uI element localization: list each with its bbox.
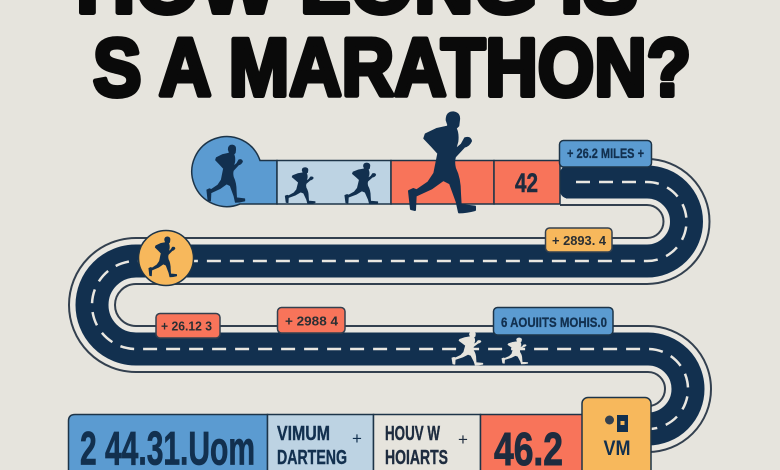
winding road — [92, 166, 688, 429]
label: orange distance one — [156, 314, 220, 338]
bottom panel: off-white: HOUV W — [385, 423, 440, 445]
badge: runner in orange circle — [138, 230, 194, 286]
label: orange distance one: + 26.12 3 — [161, 318, 212, 334]
bottom panel: blue total — [68, 414, 268, 470]
label: yellow distance — [546, 228, 612, 252]
label: 26.2 miles — [560, 140, 652, 167]
bottom panel: off-white — [374, 414, 480, 470]
runner: in blue circle — [207, 145, 245, 202]
runner: light on road two — [502, 338, 528, 364]
label: 26.2 miles: + 26.2 MILES + — [567, 145, 644, 161]
bottom panel: off-white: + — [458, 430, 468, 449]
bottom panel: light blue — [268, 414, 374, 470]
bar value: 42: 42 — [515, 168, 538, 198]
title: S A MARATHON? — [93, 22, 691, 114]
bottom panel: off-white: HOIARTS — [385, 447, 448, 469]
label: blue hours: 6 AOUIITS MOHIS.0 — [501, 314, 607, 330]
bottom panel: yellow card: VM — [604, 437, 630, 460]
bottom panel: light blue: DARTENG — [277, 447, 347, 469]
label: orange distance two: + 2988 4 — [285, 314, 339, 328]
bottom panel: light blue: VIMUM — [277, 423, 330, 445]
bottom panel: yellow card — [582, 398, 651, 470]
top progress bar — [192, 137, 560, 207]
label: blue hours — [494, 308, 613, 335]
runner: large — [409, 112, 475, 212]
label: orange distance two — [278, 308, 345, 333]
runner: small second — [345, 163, 378, 204]
label: yellow distance: + 2893. 4 — [552, 233, 607, 248]
runner: light on road one — [452, 332, 483, 365]
bottom panel: light blue: + — [352, 429, 362, 448]
runner: small first — [285, 168, 315, 204]
